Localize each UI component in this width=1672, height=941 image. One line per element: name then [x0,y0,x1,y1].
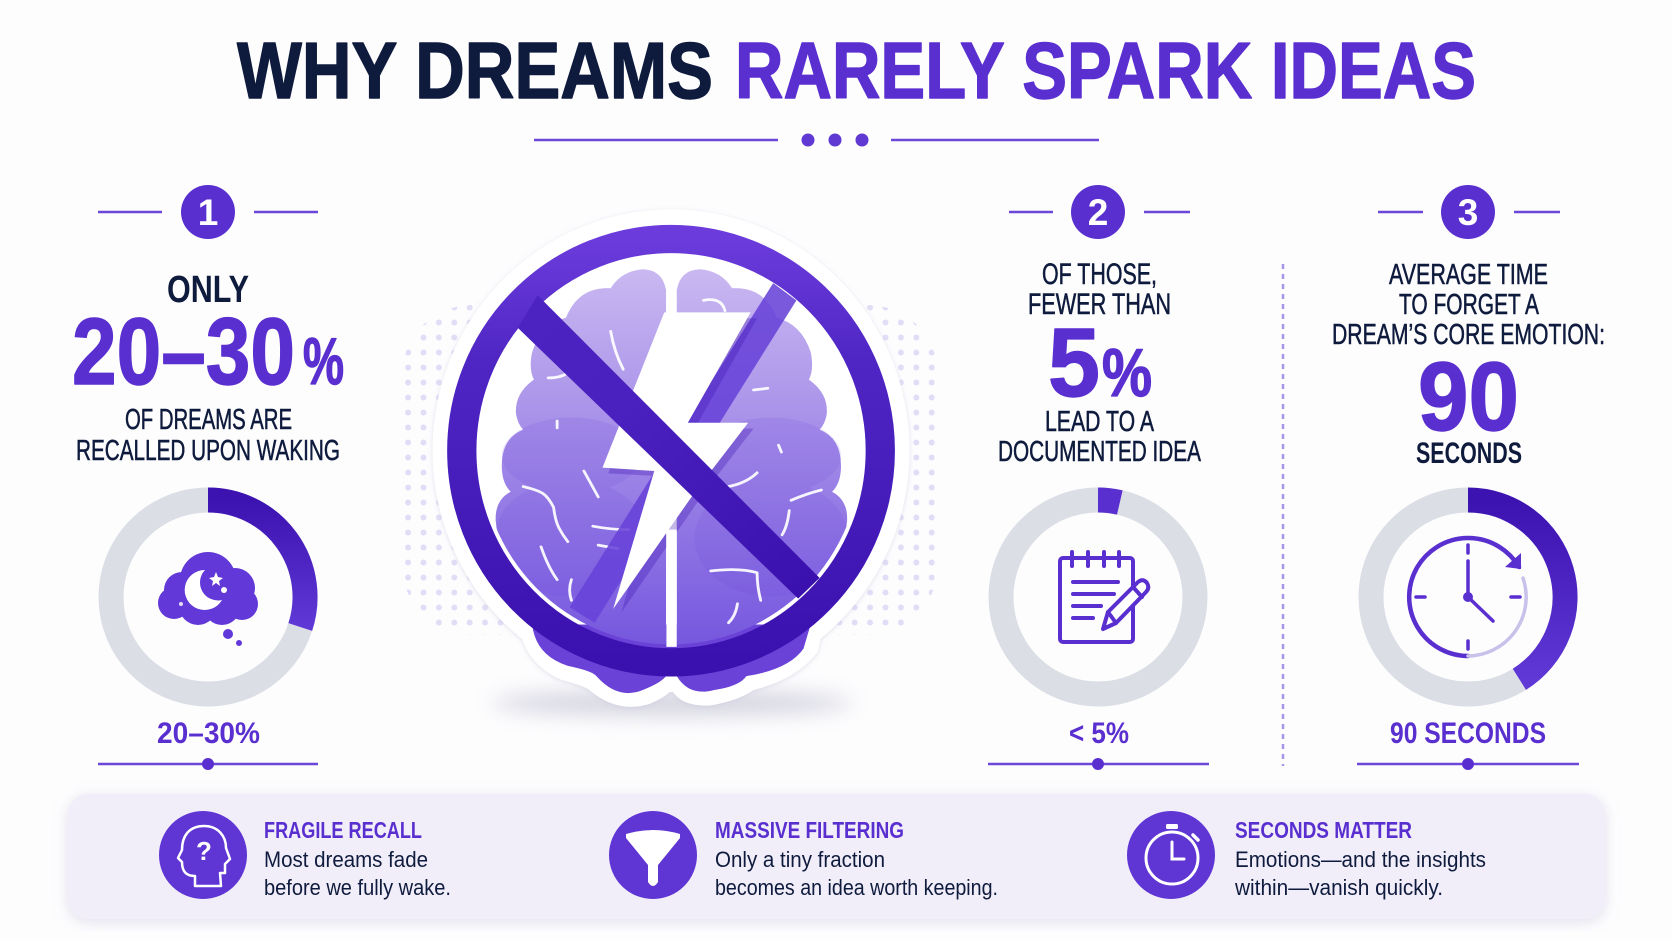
panel: stat 1 recall [72,185,344,770]
big number: 5%: % [1102,335,1152,411]
icon: funnel [609,811,697,899]
label: 20–30%: 20–30% [157,717,260,750]
dot pattern background [402,305,938,635]
takeaway: fragile recall [159,811,451,900]
text: of those fewer than [1028,258,1171,321]
marker line [988,758,1209,770]
takeaway: seconds matter [1127,811,1486,900]
takeaway: massive filtering [609,811,998,900]
big number: 5%: 5 [1048,308,1100,417]
icon: head with question mark: ? [196,836,212,866]
lightning bolt [602,312,757,612]
icon: dream cloud with moon [158,552,258,646]
step number 1 [98,185,318,239]
icon: stopwatch [1127,811,1215,899]
icon: head with question mark [159,811,247,899]
step number 1: 1 [198,192,218,233]
text: average time to forget [1332,259,1605,351]
body text: before we fully wake. [264,875,451,900]
icon: notepad and pencil [1060,552,1148,642]
text: only: ONLY [167,269,249,311]
text: of those fewer than: FEWER THAN [1028,288,1171,321]
body text [264,847,451,900]
donut chart under 5 percent [1001,500,1195,694]
big number: 5% [1048,308,1152,417]
title divider [534,134,1099,146]
step number 2: 2 [1088,192,1108,233]
body text: Most dreams fade [264,847,428,872]
big number: 20–30%: 20–30 [72,299,295,405]
heading: SECONDS MATTER [1235,817,1412,843]
heading: FRAGILE RECALL [264,817,422,843]
panel: stat 3 time to forget [1332,185,1605,770]
text: of dreams recalled: RECALLED UPON WAKING [76,435,340,467]
donut chart 30 percent [111,500,305,694]
text: of dreams recalled [76,404,340,467]
text: lead to a documented idea: DOCUMENTED IDEA [998,436,1201,468]
body text [715,847,998,900]
panel: takeaways strip [68,794,1605,919]
title: RARELY SPARK IDEAS [735,26,1476,115]
strip background [68,794,1605,919]
label: 90 seconds: 90 SECONDS [1390,717,1546,750]
body text: Emotions—and the insights [1235,847,1486,872]
step number 3 [1378,185,1560,239]
step number 3: 3 [1458,192,1478,233]
icon: clock with arrow [1409,538,1526,656]
prohibition ring [462,239,880,662]
brain lower lobes [532,624,811,693]
big number: 90: 90 [1418,342,1519,451]
panel: central illustration, brain bolt prohibited [402,209,938,716]
text: seconds: SECONDS [1416,437,1522,470]
marker line [1357,758,1579,770]
marker line [98,758,318,770]
step number 2 [1009,185,1190,239]
text: of those fewer than: OF THOSE, [1042,258,1157,291]
body text: Only a tiny fraction [715,847,885,872]
panel: stat 2 documented ideas [988,185,1209,770]
body text: becomes an idea worth keeping. [715,875,998,900]
body text [1234,847,1486,900]
text: average time to forget: TO FORGET A [1399,289,1539,321]
text: lead to a documented idea: LEAD TO A [1045,406,1154,438]
dashed column divider [1282,264,1284,766]
text: lead to a documented idea [998,406,1201,468]
title: WHY DREAMS [237,26,713,115]
ground shadow [492,690,852,716]
text: of dreams recalled: OF DREAMS ARE [125,404,292,436]
title [237,26,1476,115]
text: average time to forget: AVERAGE TIME [1389,259,1548,291]
brain [495,269,848,652]
body text: within—vanish quickly. [1234,875,1443,900]
big number: 20–30%: % [303,324,344,398]
prohibition slash [518,295,820,599]
donut chart 90 seconds [1371,500,1565,694]
heading: MASSIVE FILTERING [715,817,904,843]
faint crossing band [570,283,796,623]
label: under 5%: < 5% [1069,717,1129,750]
centre split [666,530,677,647]
sticker outline [432,209,910,707]
